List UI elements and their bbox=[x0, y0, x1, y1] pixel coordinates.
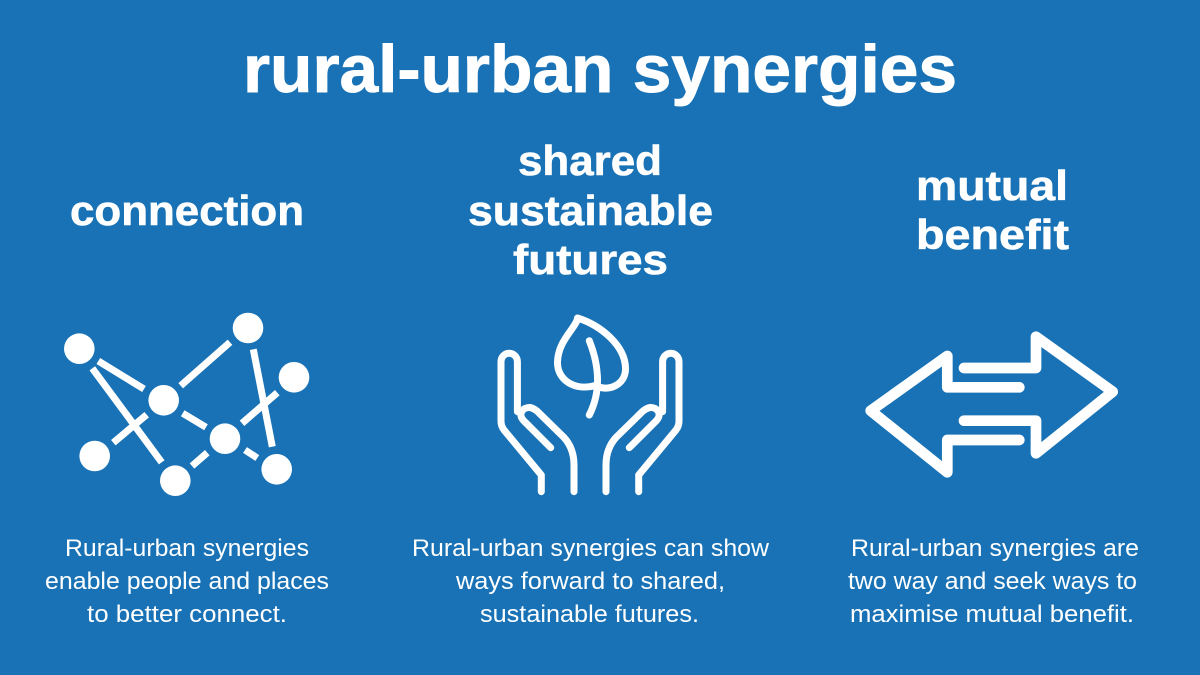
body text: shared sustainable futures: Rural-urban synergies can show bbox=[412, 535, 769, 562]
heading: shared sustainable futures: shared bbox=[518, 137, 662, 184]
body text: shared sustainable futures: sustainable futures. bbox=[480, 601, 699, 628]
icon: hands holding leaf bbox=[501, 318, 679, 492]
body text: shared sustainable futures bbox=[412, 535, 769, 628]
body text: mutual benefit: Rural-urban synergies are bbox=[851, 535, 1139, 562]
body text: mutual benefit: two way and seek ways to bbox=[848, 568, 1137, 595]
body text: connection: enable people and places bbox=[45, 568, 329, 595]
heading: mutual benefit: mutual bbox=[916, 162, 1068, 209]
heading: shared sustainable futures: futures bbox=[513, 236, 668, 283]
heading: mutual benefit: benefit bbox=[916, 211, 1069, 258]
panel: mutual benefit bbox=[848, 162, 1139, 628]
body text: connection: Rural-urban synergies bbox=[65, 535, 309, 562]
body text: mutual benefit bbox=[848, 535, 1139, 628]
title: rural-urban synergies bbox=[243, 32, 957, 107]
body text: connection: to better connect. bbox=[87, 601, 287, 628]
body text: mutual benefit: maximise mutual benefit. bbox=[850, 601, 1134, 628]
panel: shared sustainable futures bbox=[412, 137, 769, 628]
heading: connection: connection bbox=[70, 187, 304, 234]
heading: shared sustainable futures: sustainable bbox=[468, 187, 713, 234]
icon: network bbox=[64, 313, 309, 496]
heading: mutual benefit bbox=[916, 162, 1069, 258]
icon: two-way arrows bbox=[871, 337, 1113, 472]
heading: shared sustainable futures bbox=[468, 137, 713, 283]
panel: connection bbox=[45, 187, 329, 628]
body text: shared sustainable futures: ways forward to shared, bbox=[455, 568, 725, 595]
body text: connection bbox=[45, 535, 329, 628]
